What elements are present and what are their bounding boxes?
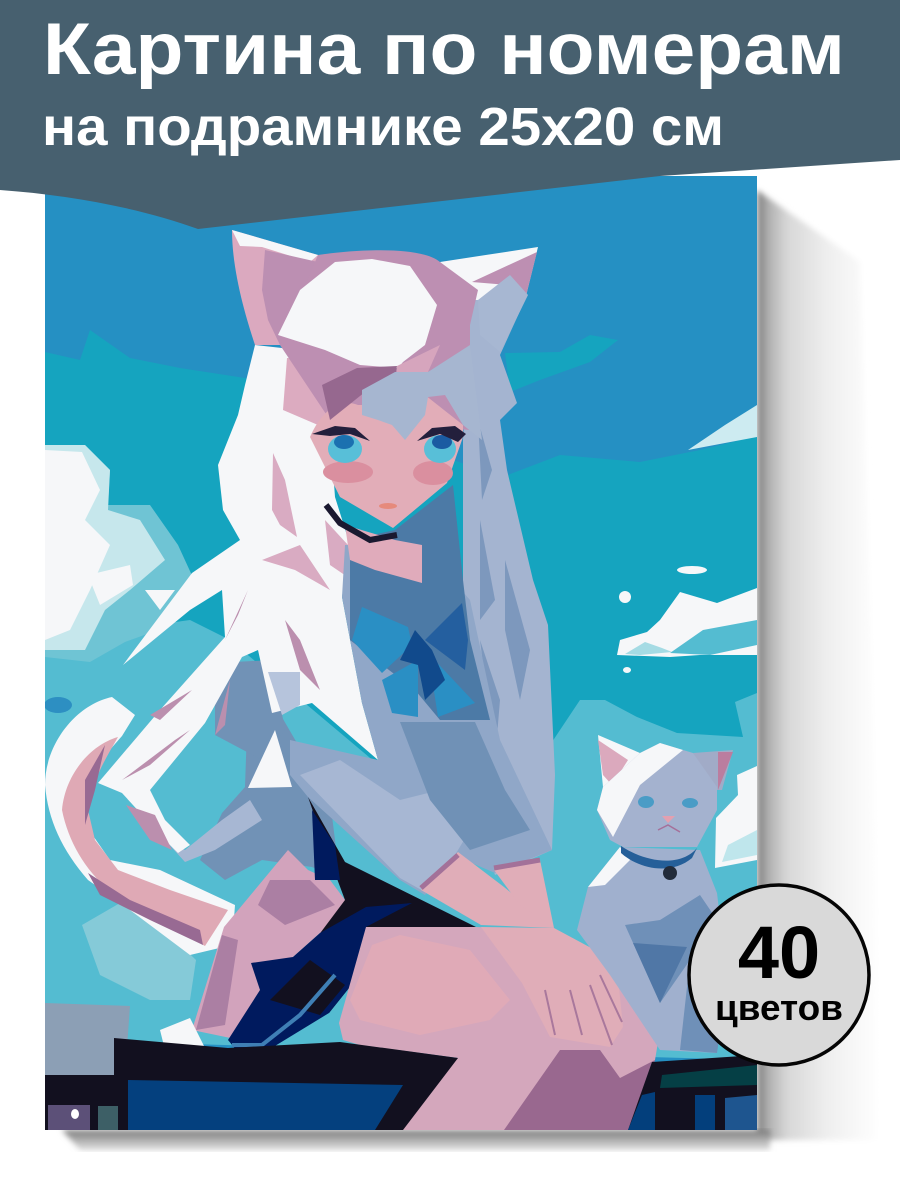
cat head (597, 743, 717, 847)
pale cloud patches (82, 903, 196, 1000)
canvas side shadow (757, 190, 885, 1140)
header banner (0, 0, 900, 229)
ear left (232, 230, 318, 345)
hand (481, 927, 623, 1047)
lower blue hair mass (200, 719, 336, 880)
navy upper fold (312, 810, 340, 880)
thigh and knee (339, 927, 660, 1130)
cat ear left inner (598, 740, 628, 785)
white cat (577, 735, 733, 1053)
cat tail (45, 697, 235, 955)
cat chest dark (633, 943, 687, 1003)
canvas bottom shadow (62, 1130, 770, 1150)
bench lower left (48, 1105, 90, 1130)
eye right (417, 426, 466, 463)
light-blue loop strand (165, 800, 262, 862)
ear right mauve tip (472, 252, 537, 294)
blue-grey hair strand (215, 660, 283, 752)
under-chin dark hair (350, 485, 490, 720)
badge number: 40 (738, 911, 820, 994)
white triangle sleeve (248, 730, 292, 788)
small blue sky blob (44, 697, 72, 713)
eye left (312, 426, 370, 463)
badge: 40 colours (689, 885, 869, 1065)
left cloud (45, 445, 195, 662)
bench right (628, 1055, 757, 1130)
right hair mass (463, 300, 555, 875)
cat bell (663, 866, 677, 880)
ear left white edge (232, 230, 318, 262)
ear right (440, 247, 538, 300)
chest skin (345, 525, 422, 583)
sleeve grey panel (268, 672, 300, 715)
title: Картина по номерам (43, 9, 845, 90)
thigh light pink (350, 935, 510, 1035)
skirt trim (232, 975, 335, 1045)
girl (45, 230, 733, 1130)
ledge black (45, 1038, 458, 1130)
sleeve cuff (421, 855, 540, 888)
sky background (45, 176, 757, 1130)
skirt black (300, 797, 476, 1013)
black panel in skirt (270, 960, 345, 1015)
bangs dark mauve (322, 366, 397, 420)
right hair shadow strands (478, 430, 530, 728)
hair pink streak lower (262, 453, 352, 590)
cat ear right inner (718, 752, 733, 790)
blush left (323, 461, 373, 483)
leg dark shadow (504, 1050, 655, 1130)
navy skirt folds (228, 903, 412, 1063)
right bang pink (397, 345, 440, 372)
bow (352, 603, 475, 717)
hair mauve top (280, 250, 478, 430)
long white hair left (98, 345, 378, 853)
shirt (290, 545, 552, 895)
mouth (379, 503, 397, 509)
hair mauve streaks (122, 590, 320, 850)
bench (45, 1003, 757, 1130)
left ledge (45, 1003, 130, 1075)
cat eyes (638, 796, 698, 808)
ear right blue fur (478, 275, 528, 322)
arm rear (494, 860, 554, 928)
cat shading (625, 895, 725, 1053)
finger lines (545, 975, 622, 1045)
face (310, 395, 463, 528)
subtitle: на подрамнике 25х20 см (42, 97, 724, 157)
bench navy panel (128, 1080, 403, 1130)
illustration: painting (44, 176, 757, 1130)
shirt shadow (400, 722, 530, 850)
badge label: цветов (715, 987, 843, 1028)
cat body (577, 847, 725, 1053)
top-right cloud streak (688, 405, 757, 450)
pale sky lower area (45, 620, 757, 1060)
arm front (421, 852, 554, 928)
cat white shoulder (588, 847, 630, 887)
pink skirt (192, 850, 366, 1040)
cat ear right (693, 750, 733, 790)
cat ear left (598, 735, 640, 790)
teal sky bands (45, 330, 757, 760)
ear left mauve (262, 250, 316, 344)
cat nose (662, 816, 675, 823)
bangs blue (362, 345, 482, 440)
skirt mauve strip (196, 880, 335, 1030)
hair white cap (278, 259, 437, 368)
right cloud (617, 566, 757, 673)
lower-right white cloud (715, 766, 757, 868)
cat mouth (658, 825, 680, 832)
blush right (413, 461, 453, 485)
shirt lighter areas (300, 760, 470, 892)
cat head white (597, 743, 683, 837)
cat collar (621, 846, 697, 869)
white skirt hem (160, 1018, 205, 1050)
choker (326, 505, 397, 540)
pink hair strip upper (283, 358, 326, 424)
